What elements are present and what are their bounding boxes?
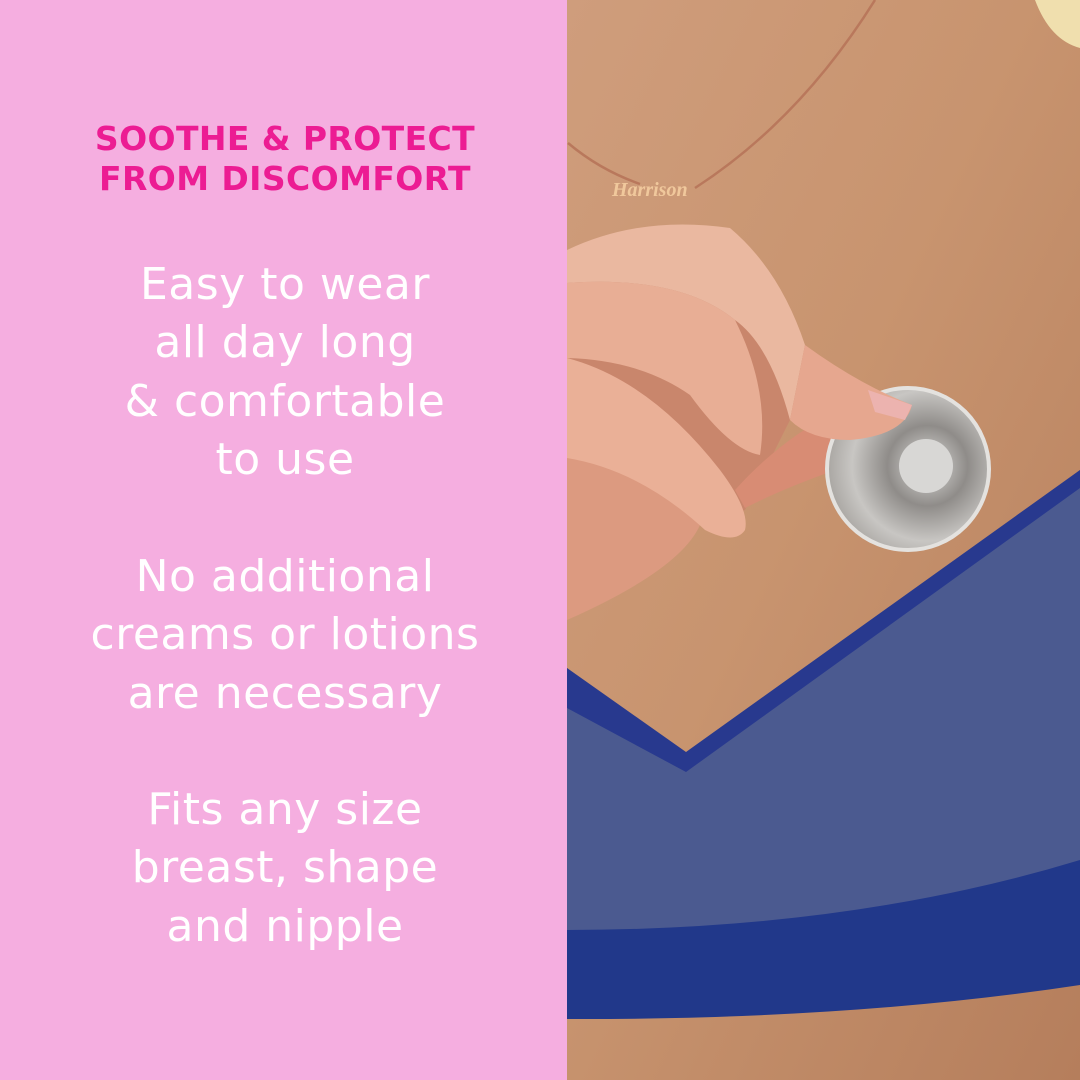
garment: trim xyxy=(567,470,1080,772)
text block: easy to wear xyxy=(125,259,445,485)
text block: easy to wear: Easy to wear xyxy=(140,259,430,310)
hand shadow backing xyxy=(567,228,805,620)
text block: easy to wear: to use xyxy=(215,434,355,485)
second finger xyxy=(567,282,762,455)
panel: text column xyxy=(0,0,567,1080)
text block: fits any size xyxy=(132,784,438,952)
text block: no creams xyxy=(91,551,479,719)
necklace xyxy=(568,0,875,201)
garment: lower band xyxy=(567,860,1080,1019)
text block: fits any size: breast, shape xyxy=(132,842,438,893)
skin background xyxy=(567,0,1080,1080)
text block: easy to wear: all day long xyxy=(154,317,416,368)
text block: fits any size: and nipple xyxy=(166,901,404,952)
heading: SOOTHE & PROTECT xyxy=(95,119,475,158)
panel: product photo illustration xyxy=(567,0,1080,1080)
text block: easy to wear: & comfortable xyxy=(125,376,445,427)
hand xyxy=(567,224,835,620)
text block: no creams: creams or lotions xyxy=(91,609,479,660)
top finger xyxy=(567,224,805,420)
necklace name: Harrison xyxy=(611,179,688,201)
heading: FROM DISCOMFORT xyxy=(99,159,471,198)
text block: no creams: No additional xyxy=(136,551,434,602)
palm xyxy=(567,455,700,620)
third finger xyxy=(567,358,746,538)
text block: fits any size: Fits any size xyxy=(147,784,423,835)
icon: silver nursing cup xyxy=(790,345,989,550)
heading xyxy=(95,119,475,198)
garment: fabric xyxy=(567,470,1080,935)
lower finger xyxy=(735,412,835,508)
fingertip xyxy=(790,345,912,440)
hair highlight xyxy=(1035,0,1080,48)
text block: no creams: are necessary xyxy=(128,668,442,719)
